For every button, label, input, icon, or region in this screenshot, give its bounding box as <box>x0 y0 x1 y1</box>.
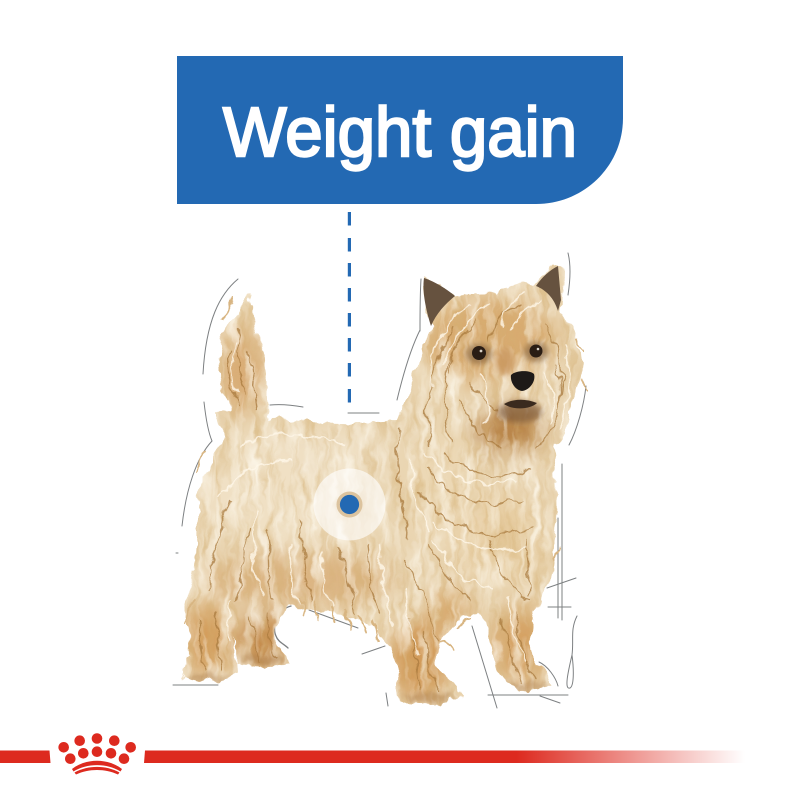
dashed connector line <box>348 212 351 402</box>
fur colouring and texture <box>170 260 590 710</box>
pale fur strands <box>220 295 569 660</box>
right ear <box>536 266 561 311</box>
heading: Weight gain: Weight gain <box>223 93 577 171</box>
left red bar <box>0 750 50 763</box>
dog fur mass with shaggy edge <box>170 260 590 710</box>
nose <box>511 371 534 391</box>
pencil sketch lines around dog <box>173 253 586 708</box>
eyes <box>472 344 542 360</box>
left ear <box>423 278 455 326</box>
footer: brand line with crown logo <box>0 733 745 774</box>
illustration: dog <box>170 260 590 710</box>
dark facial shading <box>466 342 548 423</box>
fur noise layers <box>170 260 590 710</box>
paw shadows <box>186 654 550 703</box>
marker: highlighted body area <box>314 468 386 540</box>
right red bar fading out <box>144 750 745 763</box>
halo <box>314 468 386 540</box>
mouth <box>504 400 537 408</box>
marker dot <box>340 495 359 514</box>
shaggy belly and chest fringe <box>186 300 590 650</box>
title banner <box>177 56 623 204</box>
icon: crown logo <box>58 733 136 774</box>
marker ring <box>336 492 362 518</box>
soft colour areas <box>186 298 555 700</box>
brown fur strands <box>199 305 562 690</box>
banner shape <box>177 56 623 204</box>
